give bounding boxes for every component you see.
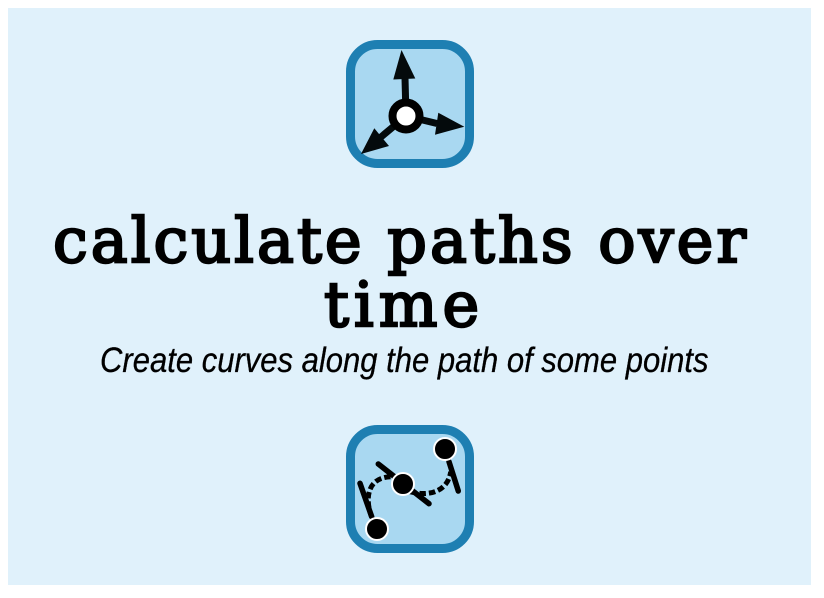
title second line: time [324,268,484,341]
icon: curves through points [346,425,474,553]
title: calculate paths over [53,204,749,277]
subtitle: Create curves along the path of some points [100,341,709,380]
icon: three arrows from a point [346,40,474,168]
